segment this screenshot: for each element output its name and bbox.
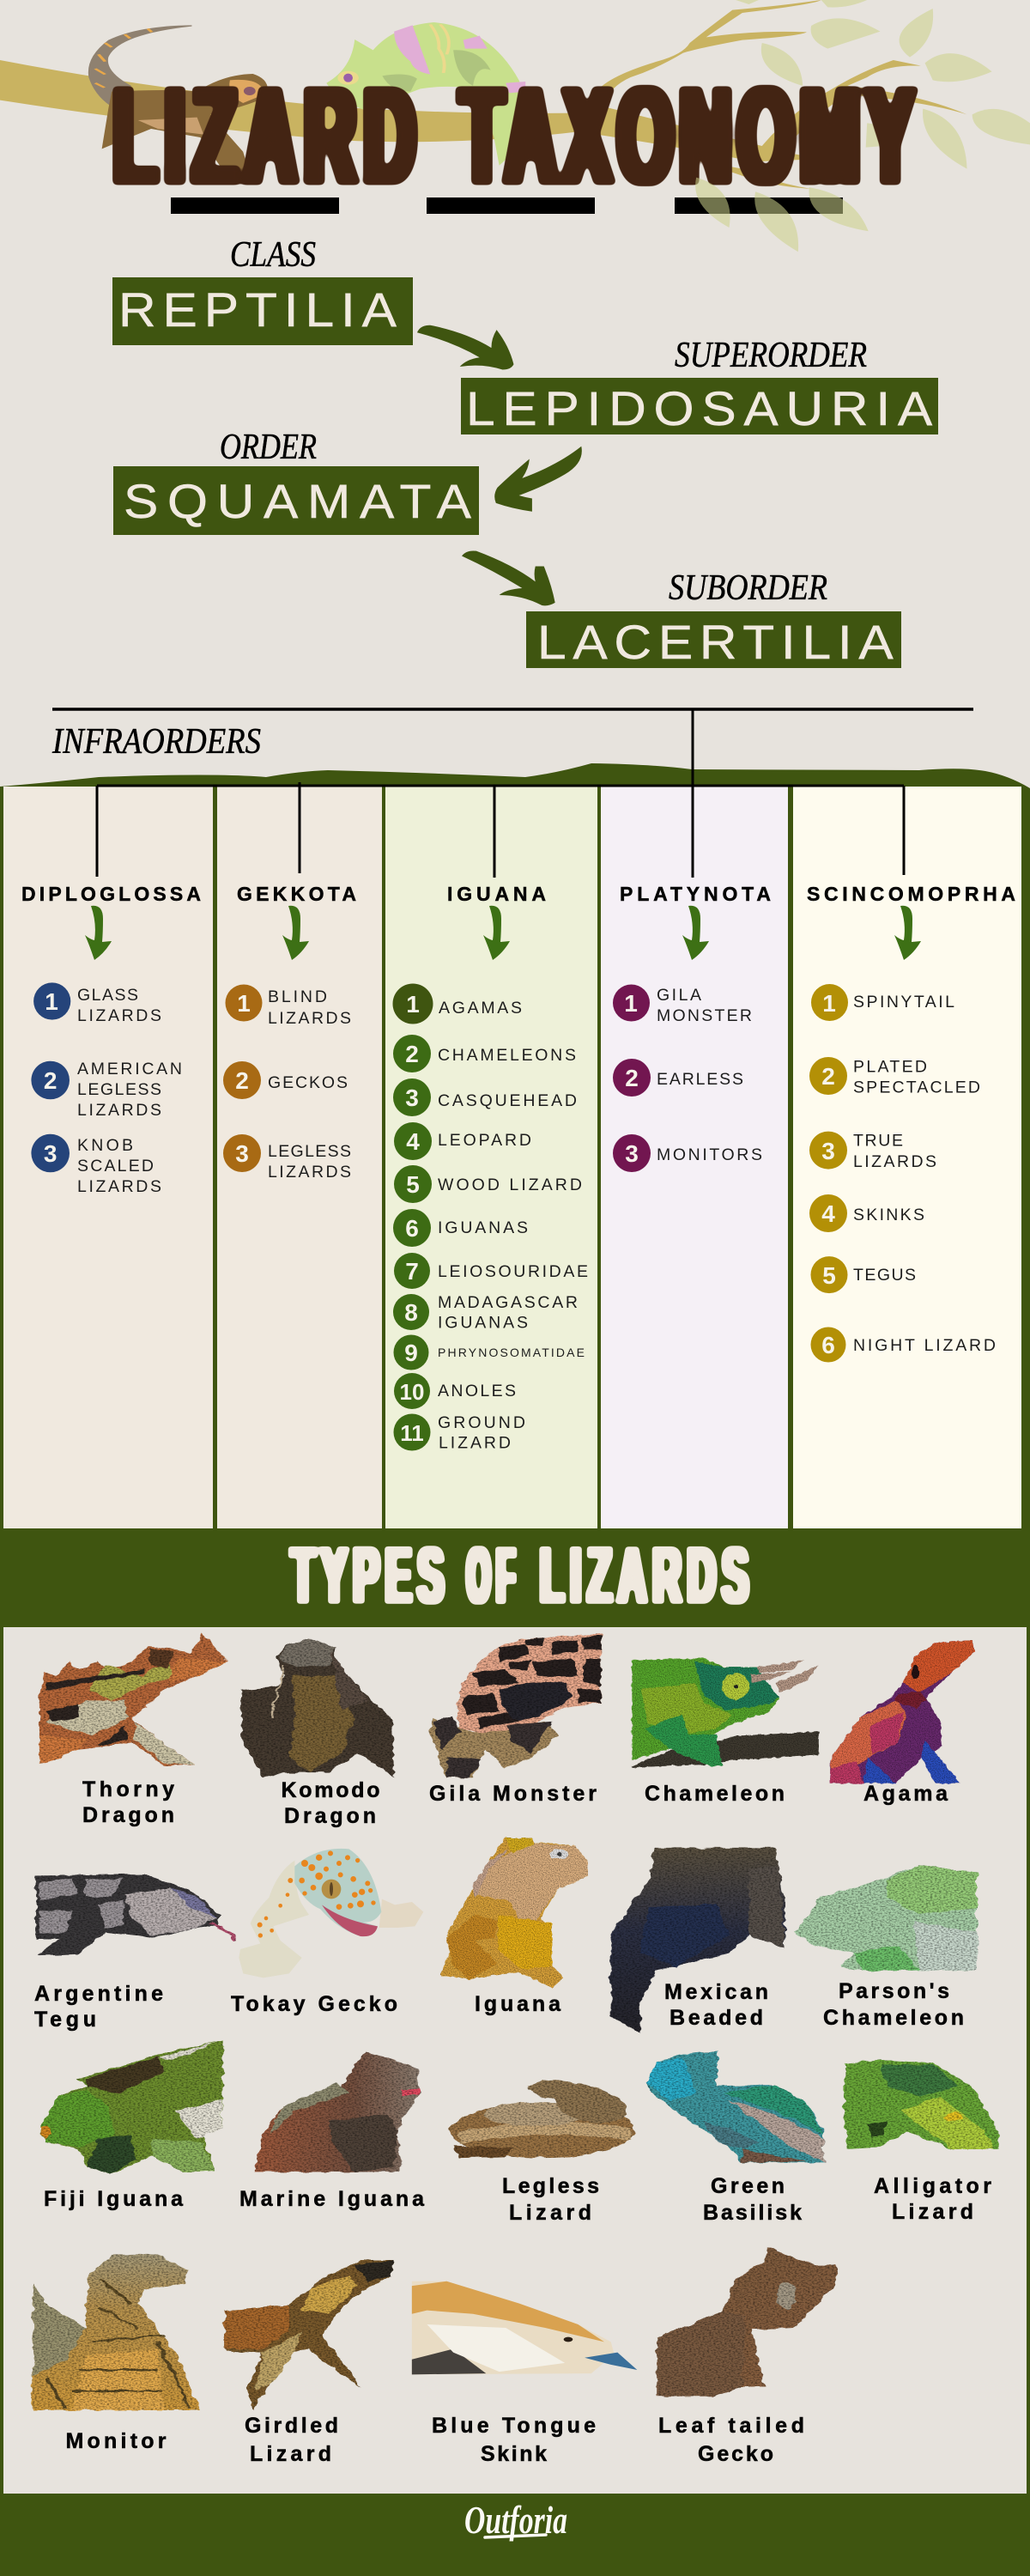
arrow [282,906,309,960]
lizard: Tokay Gecko: Tokay Gecko [231,1992,397,2016]
taxonomy: superorder [461,336,938,435]
panel: Platynota [613,883,771,1172]
lizard: Marine Iguana [239,2051,425,2211]
panel: Gekkota: GEKKOTA [237,883,356,905]
panel: Scincomorpha: 4 [821,1200,835,1227]
panel: Iguana: 8 [404,1299,418,1326]
panel: Gekkota: GECKOS [268,1073,348,1092]
arrow: superorder to order [494,447,582,512]
lizard: Green Basilisk: Basilisk [703,2201,802,2225]
lizard: Mexican Beaded [611,1848,785,2033]
panel: Diploglossa: 1 [45,988,58,1015]
panel: Scincomorpha: SPECTACLED [853,1078,980,1097]
panel: Iguana: 1 [406,991,420,1018]
panel: Scincomorpha: TRUE [853,1132,903,1151]
panel: Diploglossa: LIZARDS [77,1101,161,1120]
panel: Scincomorpha: SKINKS [853,1206,924,1224]
lizard: Thorny Dragon [39,1633,227,1827]
panel: Gekkota: BLIND [268,987,327,1006]
lizard: Legless Lizard: Legless [502,2174,599,2198]
heading: types of lizards: TYPES [291,1532,444,1619]
panel: Gekkota: LEGLESS [268,1142,351,1161]
lizard: Agama [830,1640,975,1806]
panel: Iguana: 11 [400,1420,424,1446]
lizard: Alligator Lizard [844,2060,998,2224]
footer band [0,2494,1030,2576]
lizard: Argentine Tegu [34,1874,235,2032]
panel: Scincomorpha: 2 [821,1063,835,1090]
panel: Gekkota: LIZARDS [268,1009,351,1028]
panel: Iguana: 6 [405,1215,419,1242]
lizard: Leaf tailed Gecko: Leaf tailed [658,2414,804,2438]
taxonomy: class: CLASS [230,235,316,275]
panel: Iguana: IGUANAS [438,1218,528,1237]
taxonomy: class: REPTILIA [118,283,397,337]
panel: Scincomorpha [807,883,1015,1362]
lizard: Iguana [440,1838,588,2016]
lizard on branch [88,25,268,183]
panel: Diploglossa: 2 [44,1067,57,1094]
arrow: order to suborder [462,550,555,605]
lizard: Tokay Gecko [231,1849,423,2016]
panel: Scincomorpha: 3 [821,1138,835,1164]
lizard: Parson's Chameleon: Chameleon [823,2006,964,2030]
lizard: Komodo Dragon [240,1639,394,1828]
panel: Iguana: 10 [400,1379,424,1405]
lizard: Blue Tongue Skink [412,2281,637,2466]
title underline bars [171,197,843,214]
panel: Iguana [393,883,588,1453]
taxonomy: order [113,428,479,535]
panel: Platynota: GILA [657,986,701,1005]
taxonomy: superorder: LEPIDOSAURIA [466,382,932,435]
panel: Iguana: CASQUEHEAD [438,1091,577,1110]
lizard: Leaf tailed Gecko [657,2247,838,2466]
title: LIZARD [113,60,415,213]
lizard: Parson's Chameleon [795,1865,977,2030]
lizard: Agama: Agama [863,1782,948,1806]
panel: Diploglossa: AMERICAN [77,1060,182,1078]
lizard: Fiji Iguana: Fiji Iguana [44,2187,184,2211]
panel: Scincomorpha: 6 [821,1332,835,1358]
lizard: Legless Lizard [451,2080,634,2225]
lizard: Girdled Lizard: Girdled [245,2414,338,2438]
panel: Scincomorpha background [793,787,1021,1528]
panel: Platynota: PLATYNOTA [620,883,771,905]
panel: Scincomorpha: NIGHT LIZARD [853,1336,996,1355]
leaves over bars [695,178,869,252]
panel: Scincomorpha: 1 [822,990,836,1017]
lizard: Chameleon [632,1657,819,1806]
infraorders label: INFRAORDERS [52,722,261,762]
lizard: Parson's Chameleon: Parson's [839,1979,949,2003]
panel: Platynota: MONSTER [657,1006,752,1025]
panel: Iguana: 3 [405,1084,419,1111]
footer logo: Outforia: Outforia [464,2498,567,2542]
panel: Diploglossa [21,883,201,1196]
lizard: Legless Lizard: Lizard [509,2201,591,2225]
panel: Diploglossa: GLASS [77,986,138,1005]
panel: Iguana: 2 [405,1041,419,1067]
taxonomy: suborder: SUBORDER [669,568,827,608]
arrow [682,906,709,960]
lizard: Green Basilisk: Green [711,2174,785,2198]
lizard: Komodo Dragon: Dragon [284,1804,376,1828]
lizard: Fiji Iguana [39,2040,223,2211]
panel: Iguana: AGAMAS [439,999,522,1018]
panel: Scincomorpha: TEGUS [853,1266,916,1285]
heading: types of lizards: OF [467,1531,515,1619]
taxonomy: superorder: SUPERORDER [675,336,867,375]
heading: types of lizards: LIZARDS [540,1532,748,1619]
panel: Iguana: IGUANAS [438,1314,528,1333]
lizard: Thorny Dragon: Thorny [82,1777,174,1801]
panel: Iguana: 4 [406,1128,420,1155]
panel: Gekkota background [217,787,382,1528]
chameleon on branch [326,22,536,166]
panel: Iguana: 5 [406,1171,420,1198]
lizard: Blue Tongue Skink: Blue Tongue [432,2414,596,2438]
panel: Diploglossa: DIPLOGLOSSA [21,883,201,905]
types panel frame [0,1627,1030,2494]
connector lines [52,709,973,878]
lizard: Girdled Lizard [225,2259,394,2466]
panel: Iguana background [385,787,597,1528]
lizard: Green Basilisk [647,2051,824,2225]
panel: Scincomorpha: LIZARDS [853,1152,936,1171]
heading: types of lizards [291,1531,748,1619]
taxonomy: order: SQUAMATA [124,475,471,528]
title: TAXONOMY [460,60,914,213]
panel: Gekkota: 1 [237,990,251,1017]
panel: Iguana: ANOLES [438,1382,516,1400]
lizard: Monitor [33,2254,200,2453]
types section band [0,1528,1030,1627]
panel: Diploglossa: 3 [44,1140,57,1167]
panel: Scincomorpha: 5 [822,1262,836,1289]
panel: Platynota: 2 [625,1065,639,1091]
lizard: Iguana: Iguana [475,1992,561,2016]
panel: Iguana: CHAMELEONS [438,1046,576,1065]
leaves [736,0,1030,169]
panel: Scincomorpha: PLATED [853,1058,927,1077]
panel: Iguana: MADAGASCAR [438,1293,578,1312]
arrow [483,906,510,960]
arrow [85,906,112,960]
panel: Platynota background [601,787,788,1528]
header illustration: branch, lizards and leaves [0,0,1030,189]
lizard: Leaf tailed Gecko: Gecko [698,2442,773,2466]
panel: Iguana: GROUND [438,1413,525,1432]
panel: Diploglossa: LIZARDS [77,1006,161,1025]
taxonomy: suborder [526,568,901,669]
panel: Diploglossa background [3,787,213,1528]
branch [0,0,967,189]
lizard: Marine Iguana: Marine Iguana [239,2187,425,2211]
panel: Diploglossa: KNOB [77,1136,133,1155]
panel: Gekkota: LIZARDS [268,1163,351,1182]
lizard: Mexican Beaded: Mexican [664,1980,768,2004]
lizard: Thorny Dragon: Dragon [82,1803,174,1827]
panel: Scincomorpha: SCINCOMOPRHA [807,883,1015,905]
panel: Scincomorpha: SPINYTAIL [853,993,954,1012]
panel: Iguana: LEIOSOURIDAE [438,1262,588,1281]
panel: Gekkota: 2 [235,1067,249,1094]
taxonomy: suborder: LACERTILIA [537,616,894,669]
panel: Iguana: LIZARD [439,1434,511,1453]
panel: Platynota: 3 [625,1140,639,1167]
green hill and frame [0,763,1030,1546]
panel: Gekkota [223,883,356,1182]
panel: Platynota: 1 [624,990,638,1017]
panel: Diploglossa: SCALED [77,1157,154,1176]
title [113,60,914,213]
lizard: Argentine Tegu: Tegu [34,2008,96,2032]
lizard: Girdled Lizard: Lizard [250,2442,331,2466]
lizard: Monitor: Monitor [65,2429,167,2453]
lizard: Argentine Tegu: Argentine [34,1982,163,2006]
panel: Diploglossa: LIZARDS [77,1177,161,1196]
arrow [894,906,921,960]
arrow: class to superorder [417,325,513,370]
lizard: Chameleon: Chameleon [645,1782,785,1806]
panel: Gekkota: 3 [235,1140,249,1167]
panel: Diploglossa: LEGLESS [77,1080,161,1099]
taxonomy: order: ORDER [220,428,317,467]
panel: Iguana: 7 [405,1258,419,1285]
lizard: Mexican Beaded: Beaded [670,2006,763,2030]
lizard: Gila Monster: Gila Monster [429,1782,597,1806]
panel: Iguana: WOOD LIZARD [438,1176,582,1194]
lizard: Blue Tongue Skink: Skink [481,2442,547,2466]
panel: Iguana: PHRYNOSOMATIDAE [438,1346,585,1359]
lizard: Alligator Lizard: Alligator [874,2174,991,2198]
taxonomy: class [112,235,413,345]
panel: Iguana: 9 [404,1340,418,1366]
lizard: Alligator Lizard: Lizard [892,2200,973,2224]
lizard: Gila Monster [429,1634,601,1806]
panel: Iguana: IGUANA [447,883,546,905]
lizard: Komodo Dragon: Komodo [282,1778,379,1802]
panel: Platynota: EARLESS [657,1070,743,1089]
panel: Iguana: LEOPARD [438,1131,531,1150]
panel: Platynota: MONITORS [657,1145,762,1164]
